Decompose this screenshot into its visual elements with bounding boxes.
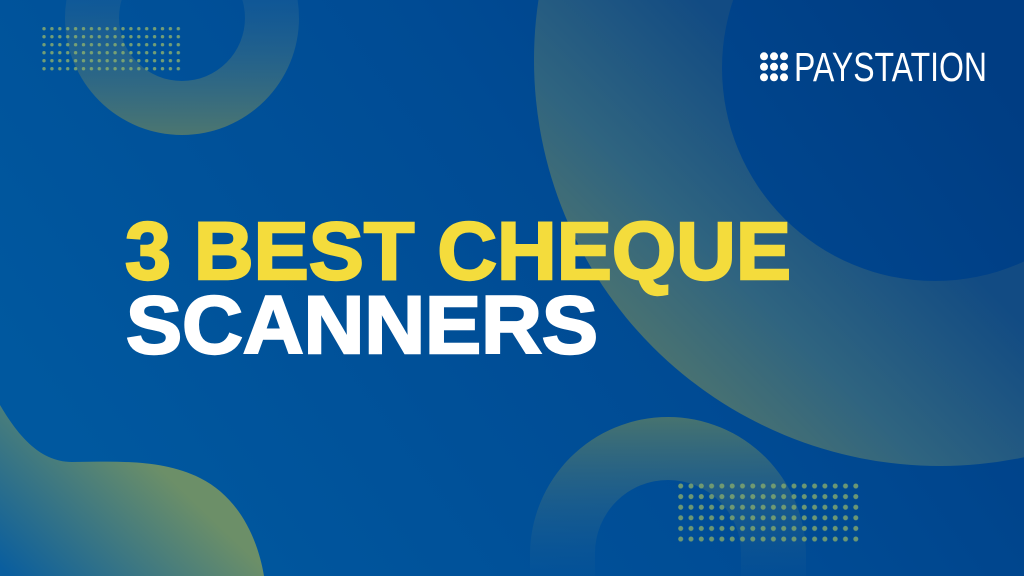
decorative bottom ring [530, 417, 806, 576]
dot grid: bottom-right [678, 482, 860, 544]
title [125, 206, 791, 371]
decorative large ring [534, 0, 1024, 466]
decorative bottom-left blob [0, 405, 264, 576]
title line 2: SCANNERS [126, 280, 598, 371]
icon: logo dots [760, 52, 788, 81]
decorative top-left ring [65, 0, 299, 135]
title line 1: 3 BEST CHEQUE [125, 206, 791, 297]
logo: Paystation [760, 44, 987, 90]
dot grid: top-left [42, 26, 182, 74]
